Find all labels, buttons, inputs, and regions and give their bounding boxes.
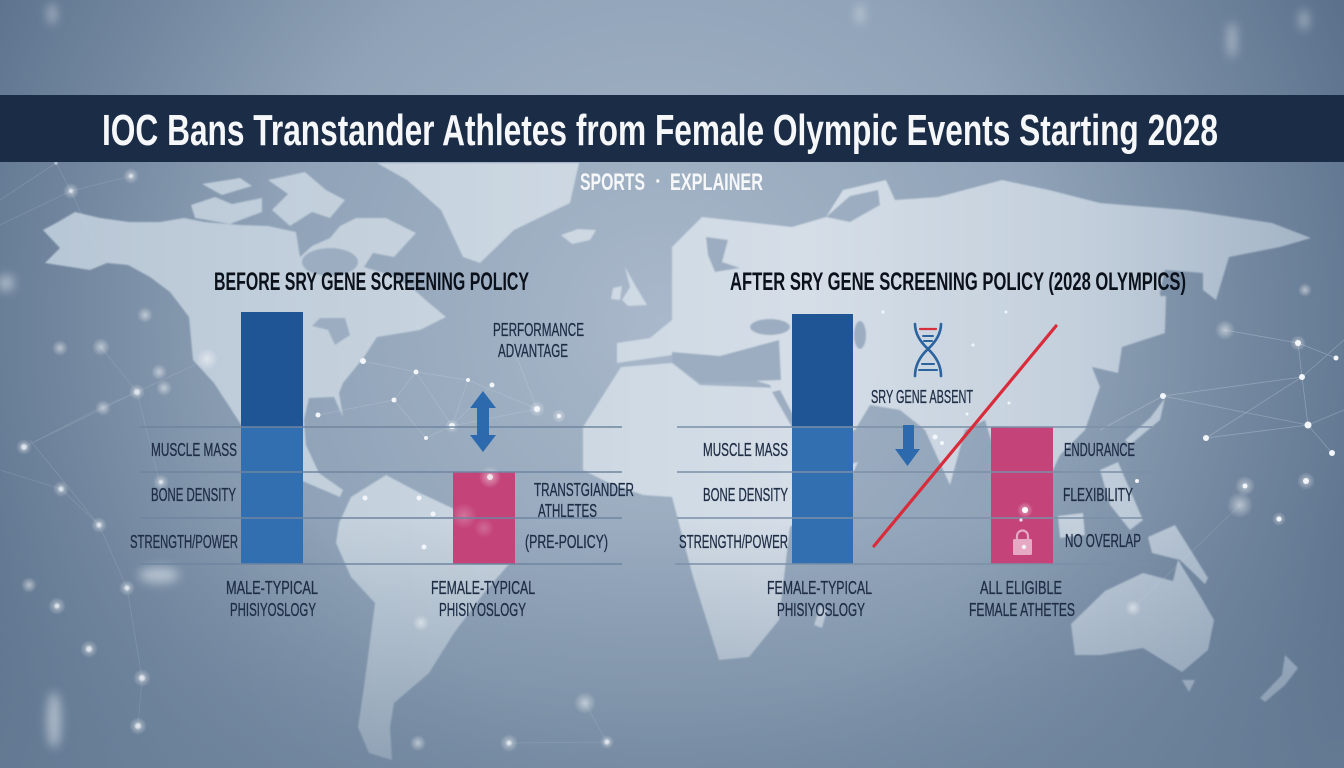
Britain bbox=[622, 267, 647, 306]
Tasmania bbox=[1182, 680, 1195, 692]
Red Sea bbox=[772, 390, 802, 434]
Arctic islands bbox=[191, 197, 262, 224]
right-side labels: ENDURANCE bbox=[1064, 440, 1135, 460]
row labels: MUSCLE MASS bbox=[703, 440, 788, 460]
label: female-typical: PHISIYOSLOGY bbox=[777, 600, 865, 620]
subtitle: sports explainer bbox=[580, 169, 763, 196]
subtitle: sports explainer: · bbox=[655, 171, 662, 193]
arrow: double-headed bbox=[470, 391, 496, 452]
Australia bbox=[1071, 560, 1214, 672]
label: male-typical bbox=[226, 578, 318, 620]
Southeast Asia islands bbox=[1100, 462, 1143, 530]
glow on pink bar bbox=[1017, 502, 1033, 522]
node dots bbox=[316, 310, 1338, 550]
callout: performance advantage: ADVANTAGE bbox=[498, 341, 568, 361]
Baltic Sea bbox=[706, 237, 740, 272]
right-side labels bbox=[1063, 440, 1141, 551]
row labels: BONE DENSITY bbox=[703, 485, 788, 505]
New Guinea bbox=[1148, 525, 1208, 584]
label: female-typical bbox=[431, 578, 535, 620]
diagonal red strike line bbox=[874, 326, 1056, 546]
callout: performance advantage bbox=[493, 320, 584, 361]
label: all eligible female athletes bbox=[969, 578, 1075, 620]
lower map fade bbox=[0, 520, 1344, 768]
right-side labels: NO OVERLAP bbox=[1065, 531, 1141, 551]
label: transgender athletes pre-policy bbox=[525, 480, 634, 552]
label: all eligible female athletes: FEMALE ATHETES bbox=[969, 600, 1075, 620]
New Zealand bbox=[1260, 655, 1298, 702]
row labels: MUSCLE MASS bbox=[151, 440, 237, 460]
grid lines bbox=[675, 427, 1152, 564]
glows on pink bar bbox=[451, 466, 501, 538]
bar: female-typical lower segment bbox=[792, 427, 853, 564]
subtitle: sports explainer: SPORTS bbox=[580, 169, 645, 196]
world map bbox=[43, 163, 1311, 760]
Eurasia bbox=[617, 180, 1311, 500]
Japan bbox=[1125, 398, 1165, 445]
Madagascar bbox=[814, 606, 827, 628]
title bar bbox=[0, 95, 1344, 162]
Iceland bbox=[561, 229, 596, 244]
bar: male-typical upper segment bbox=[241, 312, 303, 427]
label: transgender athletes pre-policy: TRANSTGIANDER bbox=[534, 480, 634, 500]
North America bbox=[43, 212, 446, 497]
bar: female-typical bbox=[453, 472, 515, 564]
label: female-typical: FEMALE-TYPICAL bbox=[431, 578, 535, 598]
bar: all eligible female athletes bbox=[991, 427, 1053, 564]
label: female-typical bbox=[767, 578, 872, 620]
label: transgender athletes pre-policy: ATHLETES bbox=[538, 501, 597, 521]
inland seas bbox=[302, 190, 880, 434]
icon: dna helix bbox=[915, 324, 941, 376]
heading: before: BEFORE SRY GENE SCREENING POLICY bbox=[214, 268, 529, 296]
label: all eligible female athletes: ALL ELIGIBLE bbox=[980, 578, 1062, 598]
row labels bbox=[679, 440, 788, 552]
Kara Sea bbox=[826, 190, 880, 222]
Caspian Sea bbox=[854, 321, 866, 349]
network links bbox=[0, 163, 1344, 743]
Greenland bbox=[377, 163, 579, 263]
Hudson Bay bbox=[302, 248, 358, 276]
row labels: STRENGTH/POWER bbox=[679, 532, 788, 552]
arrow: down bbox=[895, 425, 920, 466]
bar: female-typical upper segment bbox=[792, 314, 853, 427]
label: transgender athletes pre-policy: (PRE-POLICY) bbox=[525, 532, 608, 552]
grid lines bbox=[140, 427, 622, 564]
bar: male-typical lower segment bbox=[241, 427, 303, 564]
label: female-typical: FEMALE-TYPICAL bbox=[767, 578, 872, 598]
South America bbox=[336, 475, 514, 760]
Black Sea bbox=[750, 319, 790, 335]
node halos bbox=[16, 168, 1315, 752]
right-side labels: FLEXIBILITY bbox=[1063, 485, 1133, 505]
row labels: STRENGTH/POWER bbox=[130, 532, 238, 552]
Mediterranean Sea bbox=[672, 340, 781, 383]
label: male-typical: PHISIYOSLOGY bbox=[230, 600, 316, 620]
row labels bbox=[130, 440, 238, 552]
soft left-side node dots bbox=[21, 162, 610, 746]
label: female-typical: PHISIYOSLOGY bbox=[439, 600, 526, 620]
subtitle: sports explainer: EXPLAINER bbox=[670, 169, 763, 196]
panel: before policy bbox=[130, 268, 634, 620]
row labels: BONE DENSITY bbox=[151, 485, 236, 505]
label: sry gene absent: SRY GENE ABSENT bbox=[871, 387, 973, 407]
Great Lakes bbox=[312, 318, 350, 345]
icon: lock bbox=[1013, 531, 1032, 555]
callout: performance advantage: PERFORMANCE bbox=[493, 320, 584, 340]
Africa bbox=[583, 363, 858, 660]
panel: after policy bbox=[675, 268, 1186, 620]
Sakhalin bbox=[1160, 296, 1166, 330]
label: male-typical: MALE-TYPICAL bbox=[226, 578, 318, 598]
